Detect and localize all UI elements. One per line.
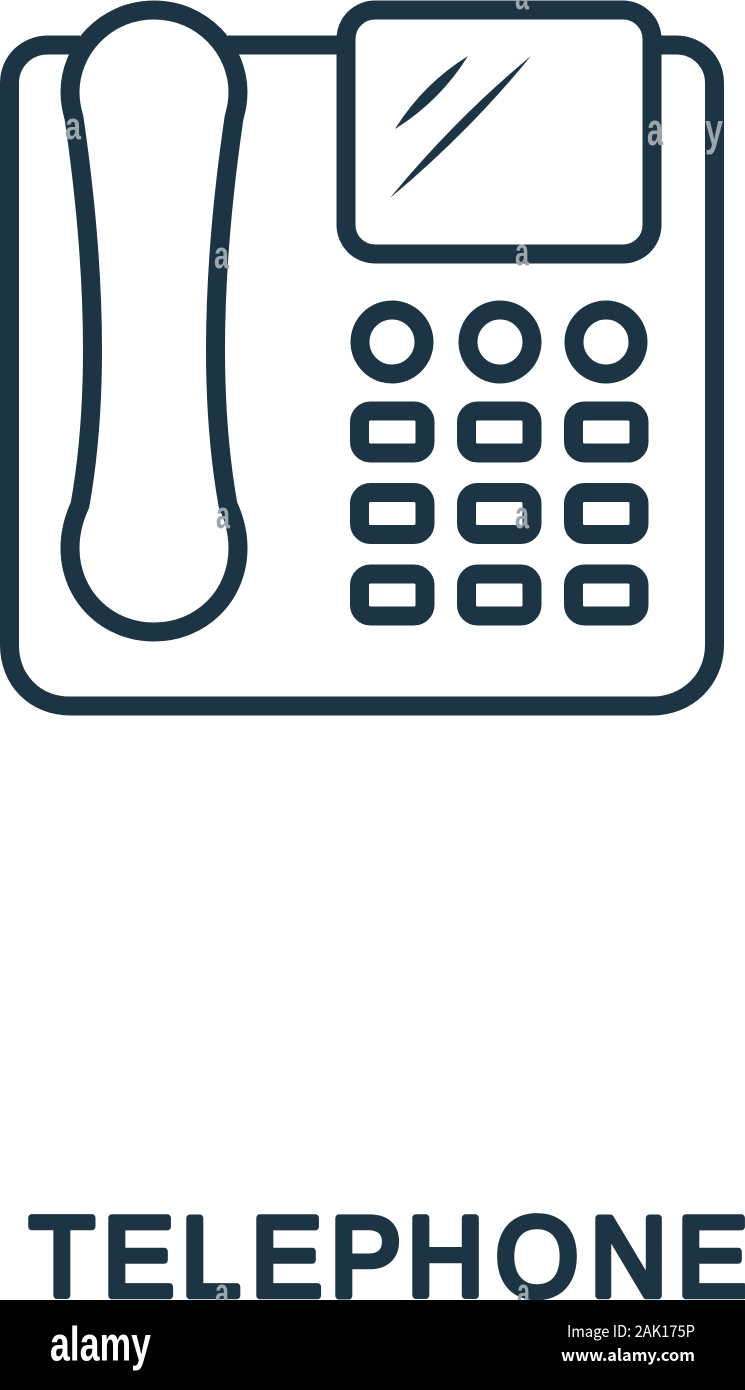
footer bar (0, 1300, 745, 1390)
keypad row 2 (360, 492, 639, 534)
stock watermark fragments: a (214, 235, 230, 277)
watermark logo: alamy (50, 1318, 151, 1372)
icon: telephone (10, 10, 714, 706)
stock watermark fragments: a (216, 495, 231, 537)
stock watermark fragments: a (515, 232, 530, 274)
stock watermark fragments: a (215, 1272, 230, 1314)
website: www.alamy.com (561, 1342, 695, 1366)
display screen (346, 10, 652, 254)
stock watermark fragments: a (65, 106, 82, 148)
telephone base (10, 45, 714, 706)
stock watermark fragments: a (647, 104, 664, 155)
stock watermark fragments: a (515, 495, 530, 537)
title: TELEPHONE (29, 1195, 745, 1320)
keypad row 1 (360, 411, 639, 453)
round buttons (360, 310, 638, 374)
stock watermark fragments: a (517, 1272, 531, 1314)
stock watermark fragments: y (705, 104, 723, 155)
image id: Image ID: 2AK175P (567, 1318, 695, 1342)
handset (70, 10, 238, 632)
keypad row 3 (360, 574, 639, 616)
screen glare (390, 56, 531, 198)
